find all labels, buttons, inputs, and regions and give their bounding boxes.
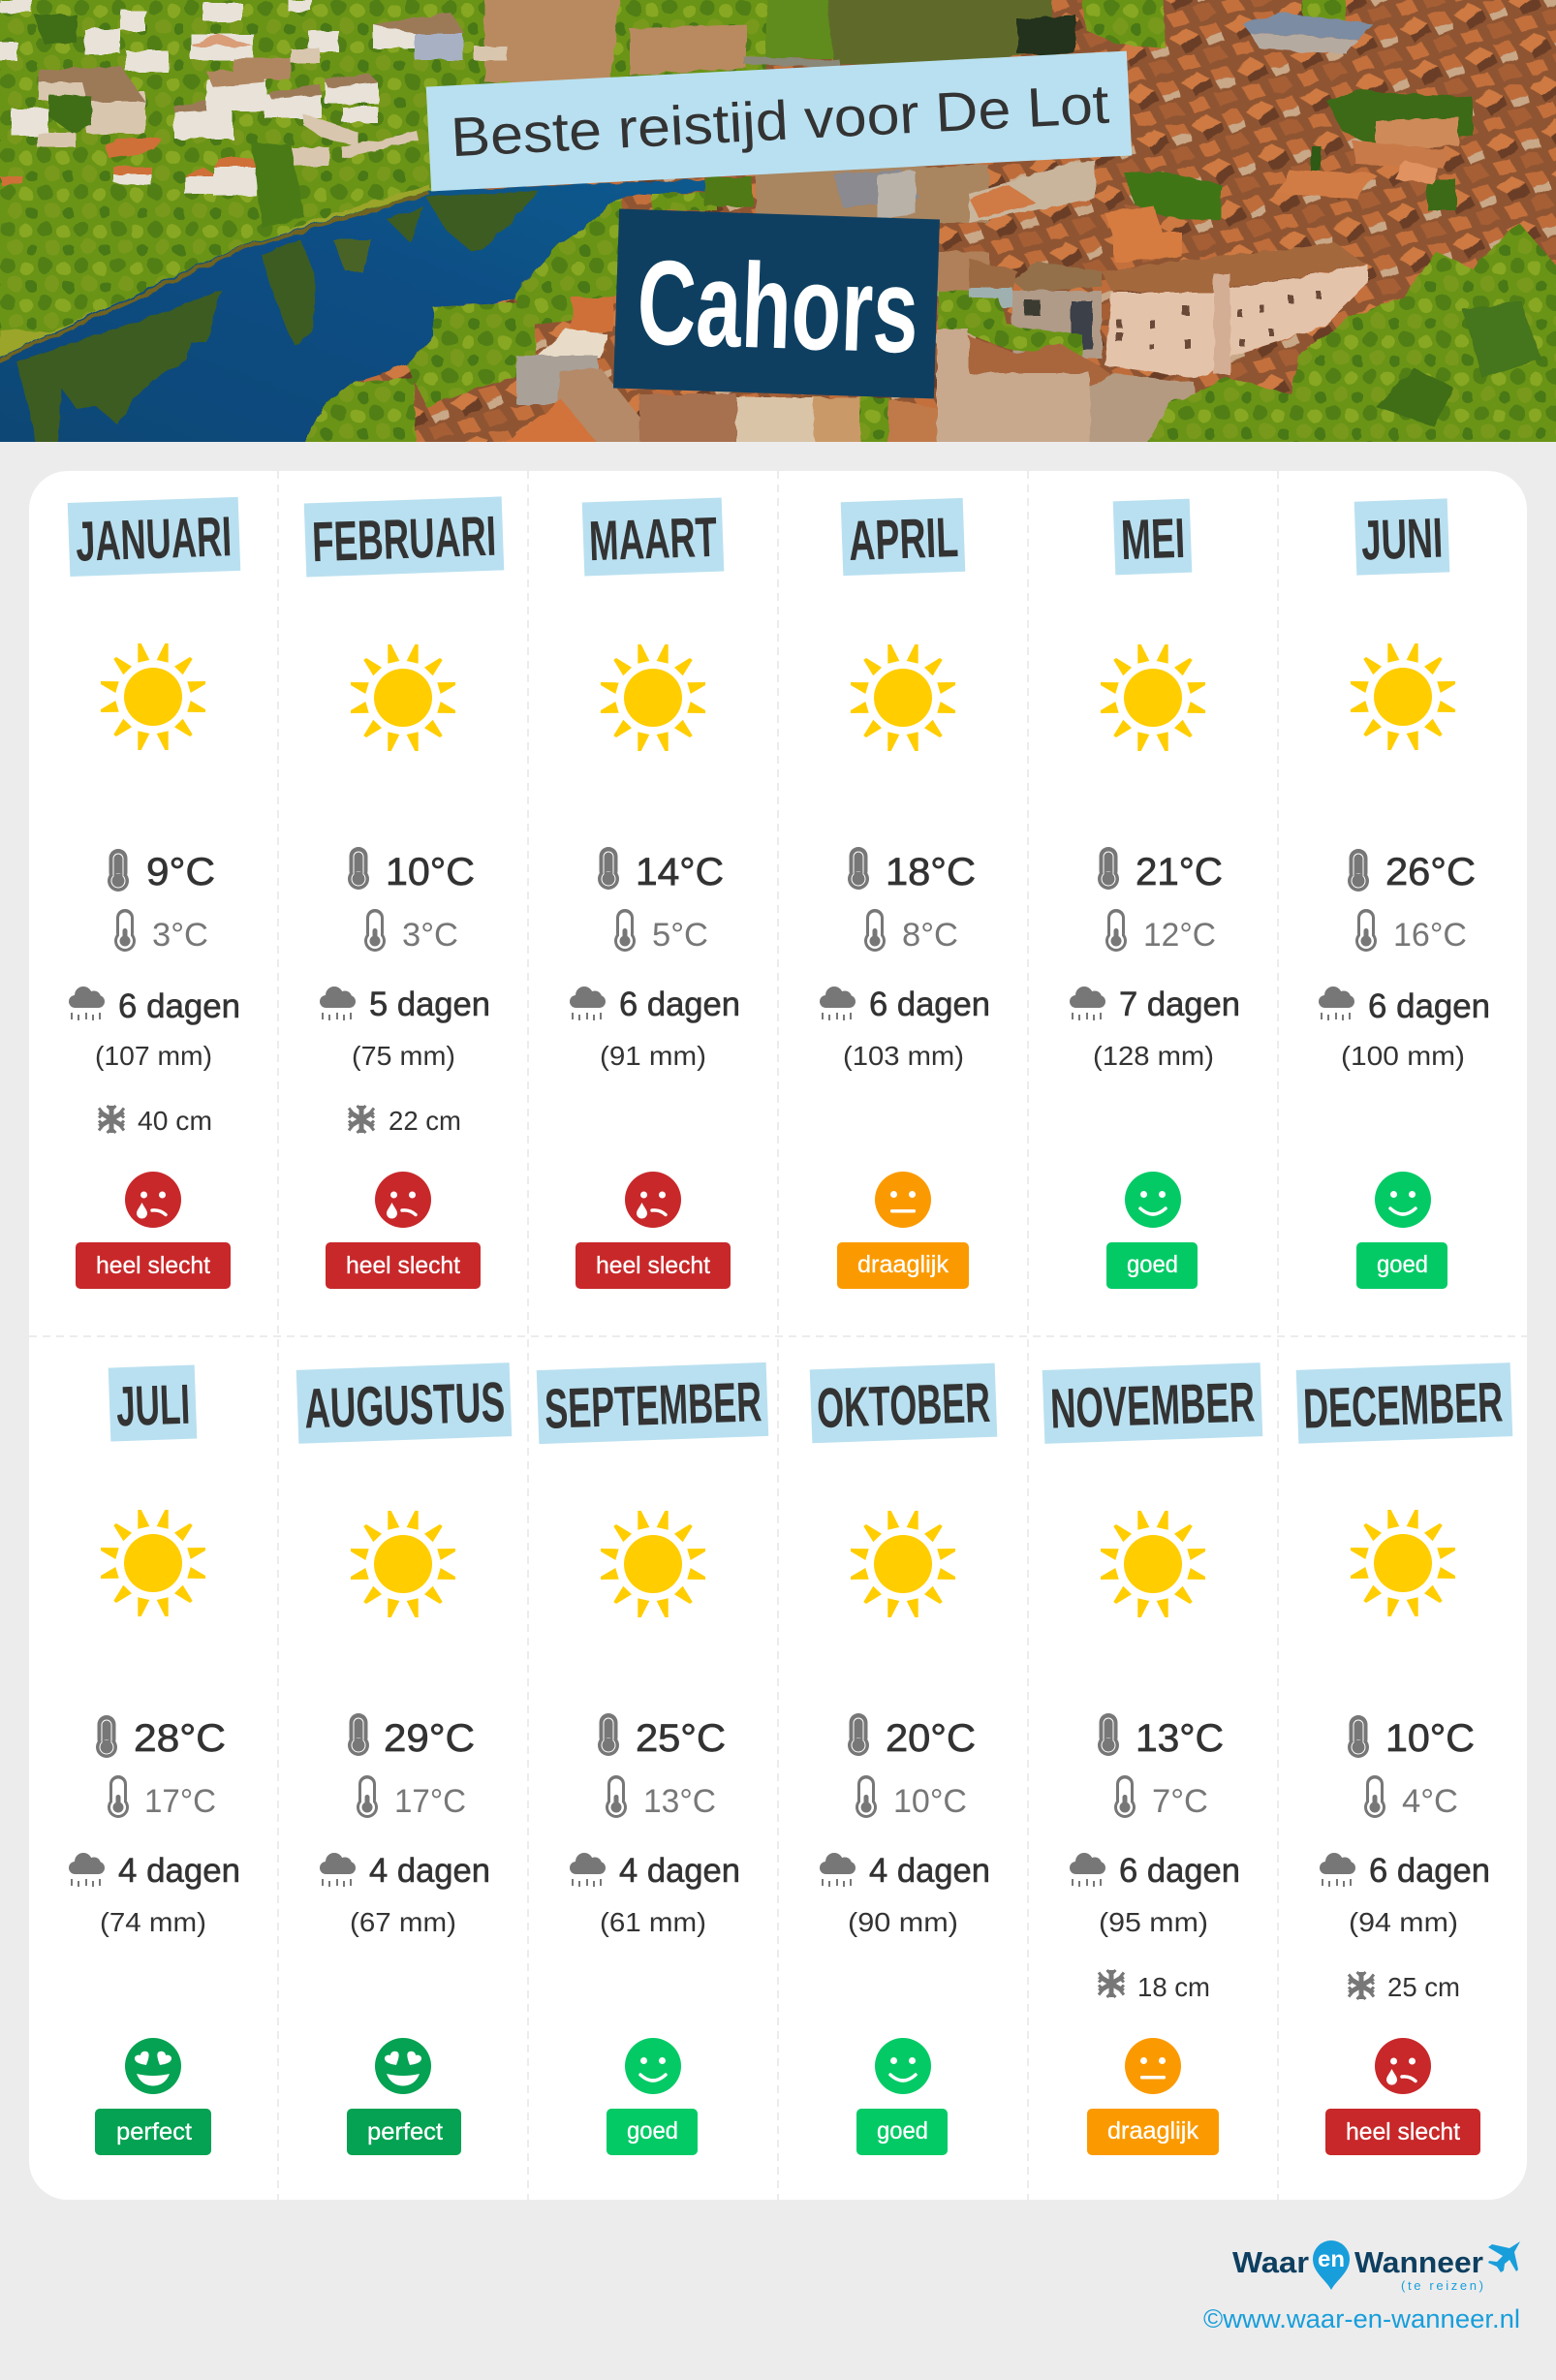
month: februari	[304, 496, 504, 1289]
month label: JUNI	[1360, 507, 1444, 572]
high temperature: 21°C	[1136, 851, 1223, 893]
month label: AUGUSTUS	[303, 1370, 506, 1441]
left trees	[48, 94, 92, 134]
rating badge: goed	[877, 2117, 928, 2145]
riverside trees	[305, 378, 417, 442]
rain days: 4 dagen	[619, 1852, 740, 1890]
month label	[296, 1362, 512, 1444]
rain days: 4 dagen	[369, 1852, 490, 1890]
month label: JANUARI	[75, 505, 233, 574]
low temperature: 8°C	[902, 917, 958, 954]
low temperature: 4°C	[1402, 1783, 1458, 1820]
icon: map pin	[1313, 2240, 1350, 2290]
logo: Waar en Wanneer	[1232, 2240, 1520, 2293]
high temperature	[96, 1715, 226, 1760]
snowfall: 18 cm	[1137, 1972, 1210, 2002]
rainfall: (91 mm)	[600, 1041, 706, 1071]
rating face	[625, 1172, 681, 1228]
high temperature	[598, 847, 724, 893]
high temperature: 29°C	[384, 1717, 475, 1760]
rain days: 6 dagen	[869, 986, 990, 1023]
left town buildings	[84, 29, 121, 54]
high temperature: 13°C	[1136, 1717, 1224, 1760]
white calendar card	[29, 471, 1527, 2200]
high temperature: 10°C	[386, 851, 475, 893]
rain days: 6 dagen	[118, 987, 240, 1025]
rating face	[375, 2038, 431, 2094]
rating badge: goed	[627, 2117, 678, 2145]
rainfall: (103 mm)	[843, 1041, 964, 1071]
icon: sun	[351, 644, 455, 751]
logo: Waar en Wanneer: (te reizen)	[1401, 2278, 1483, 2293]
rainfall: (95 mm)	[1099, 1907, 1208, 1937]
rating badge	[76, 1242, 231, 1289]
central buildings under title	[572, 298, 613, 332]
rain days	[1319, 986, 1490, 1025]
rain days: 4 dagen	[118, 1852, 240, 1890]
icon: sun	[851, 1511, 955, 1617]
month label	[304, 496, 504, 578]
month label	[537, 1362, 768, 1444]
icon: sun	[1351, 643, 1455, 750]
city name box: Cahors	[636, 235, 920, 379]
low temperature	[856, 1775, 967, 1820]
month label	[68, 497, 240, 577]
icon: sun	[1351, 1510, 1455, 1616]
rating badge	[607, 2109, 698, 2155]
low temperature	[1355, 909, 1467, 954]
high temperature: 10°C	[1385, 1717, 1475, 1760]
low temperature	[1114, 1775, 1208, 1820]
low temperature: 10°C	[893, 1783, 967, 1820]
rating face	[1375, 2038, 1431, 2094]
month: oktober	[810, 1363, 997, 2155]
snowfall: 40 cm	[138, 1106, 212, 1136]
rating badge	[1087, 2109, 1219, 2155]
rating badge	[1356, 1242, 1447, 1289]
rating badge: heel slecht	[596, 1252, 710, 1279]
month label	[109, 1364, 197, 1442]
rainfall: (94 mm)	[1349, 1907, 1458, 1937]
icon: sun	[351, 1511, 455, 1617]
high temperature	[1098, 847, 1223, 893]
high temperature: 14°C	[636, 851, 724, 893]
rating badge: heel slecht	[346, 1252, 460, 1279]
snowfall	[1099, 1970, 1210, 2002]
rating badge: draaglijk	[1107, 2117, 1198, 2145]
low temperature: 16°C	[1393, 917, 1467, 954]
rating face	[125, 1172, 181, 1228]
title banner: Beste reistijd voor De Lot	[450, 74, 1110, 169]
low temperature: 17°C	[394, 1783, 466, 1820]
rating face	[875, 1172, 931, 1228]
month: januari	[68, 497, 240, 1289]
icon: sun	[1101, 644, 1205, 751]
big stone building	[1102, 242, 1366, 294]
month: juli	[69, 1364, 240, 2155]
city name box	[613, 209, 940, 398]
icon: sun	[1101, 1511, 1205, 1617]
month: juni	[1319, 498, 1490, 1289]
title banner	[426, 51, 1132, 191]
month label: MAART	[588, 506, 718, 573]
month label: NOVEMBER	[1049, 1370, 1256, 1441]
low temperature	[357, 1775, 466, 1820]
month label: OKTOBER	[816, 1371, 991, 1440]
month: november	[1043, 1362, 1262, 2155]
rating face	[1375, 1172, 1431, 1228]
month label	[810, 1363, 997, 1443]
month label	[1113, 499, 1192, 575]
logo: Waar en Wanneer: en	[1318, 2246, 1345, 2271]
rainfall: (100 mm)	[1341, 1041, 1465, 1071]
rating badge: heel slecht	[1346, 2118, 1460, 2145]
snowfall: 22 cm	[389, 1106, 461, 1136]
high temperature	[1098, 1713, 1224, 1760]
month: maart	[570, 498, 740, 1289]
month: september	[537, 1362, 768, 2155]
high temperature	[598, 1713, 726, 1760]
rainfall: (107 mm)	[95, 1041, 212, 1071]
rating badge: perfect	[367, 2118, 443, 2145]
rainfall: (67 mm)	[350, 1907, 456, 1937]
rainfall: (90 mm)	[848, 1907, 958, 1937]
rating badge: heel slecht	[96, 1252, 210, 1279]
low temperature: 17°C	[144, 1783, 216, 1820]
month label	[841, 498, 965, 576]
rating badge: draaglijk	[857, 1251, 949, 1278]
low temperature: 13°C	[643, 1783, 716, 1820]
low temperature	[108, 1775, 216, 1820]
big trees lower right	[1140, 223, 1556, 455]
low temperature	[114, 909, 208, 954]
snowfall	[1349, 1972, 1460, 2002]
town roofs to the right	[1124, 172, 1221, 220]
low temperature	[606, 1775, 716, 1820]
snowfall	[99, 1106, 212, 1136]
month label	[582, 498, 724, 576]
month: mei	[1070, 499, 1240, 1289]
rainfall: (128 mm)	[1093, 1041, 1214, 1071]
low temperature: 7°C	[1152, 1783, 1208, 1820]
high temperature	[348, 847, 475, 893]
copyright url: ©www.waar-en-wanneer.nl	[1203, 2304, 1520, 2333]
month label: MEI	[1120, 507, 1186, 572]
low temperature: 3°C	[152, 917, 208, 954]
month label	[1043, 1362, 1262, 1444]
high temperature: 26°C	[1385, 851, 1476, 893]
high temperature	[848, 847, 976, 893]
high temperature	[348, 1713, 475, 1760]
high temperature	[1348, 849, 1476, 893]
rainfall: (61 mm)	[600, 1907, 706, 1937]
rain days: 6 dagen	[619, 986, 740, 1023]
icon: sun	[851, 644, 955, 751]
high temperature	[108, 849, 215, 893]
high temperature	[1348, 1715, 1475, 1760]
high temperature: 9°C	[146, 851, 215, 893]
high temperature: 18°C	[886, 851, 976, 893]
rating face	[125, 2038, 181, 2094]
rating badge	[576, 1242, 731, 1289]
rain days: 5 dagen	[369, 986, 490, 1023]
month label: FEBRUARI	[311, 505, 497, 574]
low temperature	[614, 909, 708, 954]
month label: SEPTEMBER	[544, 1370, 762, 1441]
icon: airplane	[1488, 2241, 1520, 2272]
icon: sun	[601, 644, 705, 751]
rain days: 6 dagen	[1368, 987, 1490, 1025]
low temperature	[1364, 1775, 1458, 1820]
rating face	[1125, 2038, 1181, 2094]
rain days: 6 dagen	[1369, 1852, 1490, 1890]
month: december	[1296, 1362, 1512, 2155]
high temperature	[848, 1713, 976, 1760]
rating badge	[856, 2109, 948, 2155]
low temperature	[864, 909, 958, 954]
icon: sun	[601, 1511, 705, 1617]
rain days: 4 dagen	[869, 1852, 990, 1890]
rating badge	[1106, 1242, 1198, 1289]
low temperature	[1105, 909, 1216, 954]
high temperature: 28°C	[134, 1717, 226, 1760]
logo: Waar en Wanneer: Waar	[1232, 2245, 1309, 2279]
icon: sun	[101, 643, 205, 750]
snowfall: 25 cm	[1387, 1972, 1460, 2002]
month: april	[820, 498, 990, 1289]
snowfall	[349, 1106, 461, 1136]
high temperature: 20°C	[886, 1717, 976, 1760]
rain days: 7 dagen	[1119, 986, 1240, 1023]
low temperature: 5°C	[652, 917, 708, 954]
rating face	[375, 1172, 431, 1228]
rating badge	[95, 2109, 211, 2155]
rain days	[69, 986, 240, 1025]
month label: APRIL	[848, 506, 959, 573]
logo: Waar en Wanneer: Wanneer	[1354, 2245, 1483, 2279]
month label	[1354, 498, 1449, 576]
icon: sun	[101, 1510, 205, 1616]
low temperature: 12°C	[1143, 917, 1216, 954]
month: augustus	[296, 1362, 512, 2155]
rating badge: perfect	[116, 2118, 192, 2145]
rainfall: (74 mm)	[100, 1907, 206, 1937]
rain days: 6 dagen	[1119, 1852, 1240, 1890]
high temperature: 25°C	[636, 1717, 726, 1760]
rating badge	[837, 1242, 969, 1289]
rating face	[875, 2038, 931, 2094]
rating badge	[347, 2109, 461, 2155]
rating badge: goed	[1377, 1251, 1428, 1278]
rainfall: (75 mm)	[352, 1041, 455, 1071]
rating face	[625, 2038, 681, 2094]
month label: JULI	[115, 1373, 191, 1438]
rating face	[1125, 1172, 1181, 1228]
header photo: aerial view of Cahors	[0, 0, 1556, 455]
river	[0, 179, 704, 455]
low temperature: 3°C	[402, 917, 458, 954]
low temperature	[364, 909, 458, 954]
rating badge: goed	[1127, 1251, 1178, 1278]
rating badge	[326, 1242, 481, 1289]
rating badge	[1325, 2109, 1480, 2155]
